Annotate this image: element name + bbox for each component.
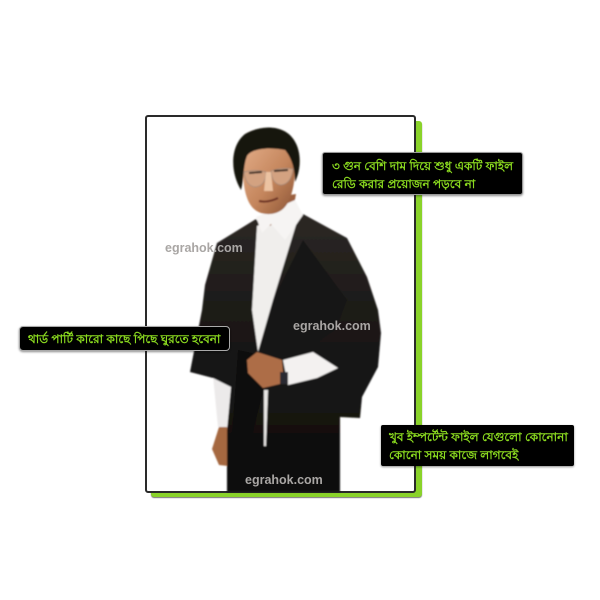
callout: important files: খুব ইম্পর্টেন্ট ফাইল যেগুলো কোনোনা: [389, 430, 568, 444]
head: [233, 127, 300, 214]
callout: price: [322, 152, 523, 195]
glasses: [244, 168, 293, 187]
left shirt cuff: [213, 376, 231, 428]
watermark: egrahok.com: [165, 241, 243, 255]
main photo frame: [145, 115, 416, 493]
hair: [233, 127, 300, 190]
shirt collar: [256, 200, 303, 240]
callout: important files: কোনো সময় কাজে লাগবেই: [389, 448, 518, 462]
green offset frame: [151, 121, 422, 497]
watermark: egrahok.com: [293, 319, 371, 333]
right shirt cuff: [283, 352, 338, 385]
callout: third party: থার্ড পার্টি কারো কাছে পিছে ঘুরতে হবেনা: [28, 332, 220, 346]
left hand: [212, 427, 228, 466]
right hand: [247, 352, 284, 388]
neck: [259, 194, 296, 226]
mouth: [259, 198, 278, 202]
callout: price: রেডি করার প্রয়োজন পড়বে না: [332, 177, 475, 191]
shirt front: [252, 215, 296, 446]
callout: third party: [19, 326, 230, 351]
nose: [264, 172, 273, 191]
gown: [190, 214, 381, 492]
watermark: egrahok.com: [245, 473, 323, 487]
callout: price: ৩ গুন বেশি দাম দিয়ে শুধু একটি ফাইল: [332, 159, 513, 173]
watch: [280, 372, 288, 384]
callout: important files: [381, 425, 574, 466]
